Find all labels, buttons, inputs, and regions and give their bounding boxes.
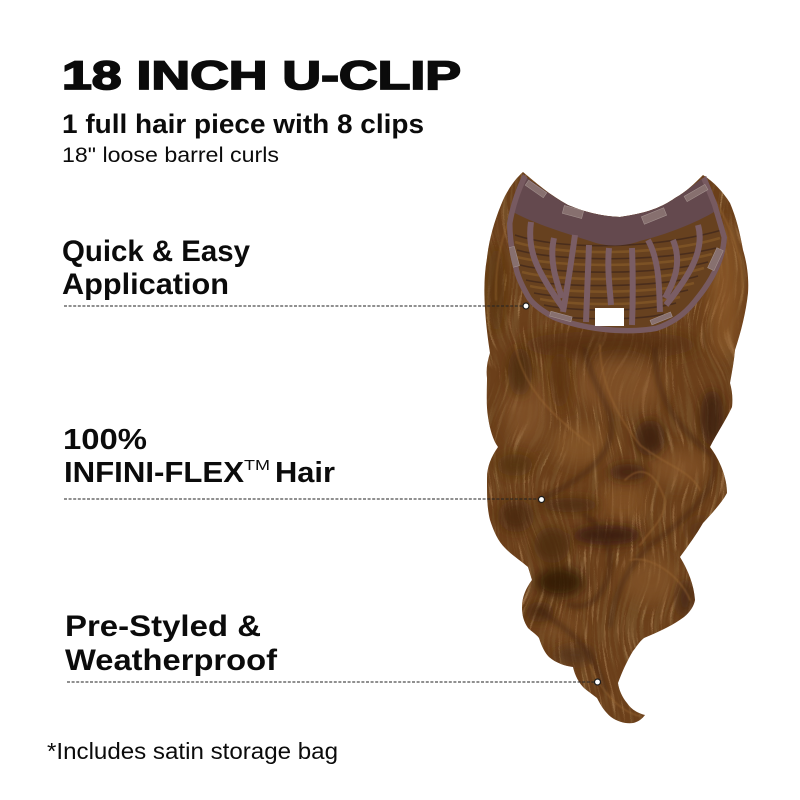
feature label: infini-flex hair bbox=[63, 424, 335, 489]
feature label: pre-styled and weatherproof: Pre-Styled & bbox=[65, 610, 261, 643]
callout line: application bbox=[64, 303, 529, 309]
subtitle: curl description: 18" loose barrel curls bbox=[62, 144, 279, 167]
callout line: weatherproof bbox=[67, 679, 600, 685]
footnote: *Includes satin storage bag bbox=[47, 738, 338, 764]
cap ribs bbox=[530, 222, 700, 325]
clips bbox=[508, 180, 723, 325]
hair light and shadow lobes bbox=[488, 220, 741, 663]
cap edge binding bbox=[507, 174, 727, 333]
hair curl bands bbox=[540, 350, 714, 690]
feature label: quick and easy application bbox=[62, 235, 250, 301]
feature label: quick and easy application: Application bbox=[62, 268, 229, 301]
hair strand texture bbox=[484, 172, 745, 724]
feature label: infini-flex hair: TM bbox=[244, 457, 270, 474]
feature label: pre-styled and weatherproof bbox=[65, 610, 278, 677]
hair wave strokes bbox=[496, 200, 743, 716]
feature label: infini-flex hair: 100% bbox=[63, 424, 147, 456]
callout line: hair bbox=[64, 496, 544, 502]
u-shaped wig cap bbox=[507, 174, 727, 334]
title: 18 INCH U-CLIP bbox=[62, 54, 461, 98]
cap top band bbox=[513, 172, 722, 246]
feature label: infini-flex hair: Hair bbox=[275, 457, 335, 489]
hair body bbox=[484, 172, 748, 724]
feature label: pre-styled and weatherproof: Weatherproof bbox=[65, 644, 278, 677]
subtitle: hair piece count: 1 full hair piece with 8 clips bbox=[62, 109, 424, 139]
cap weft rows bbox=[515, 238, 720, 304]
feature label: infini-flex hair: INFINI-FLEX bbox=[64, 457, 245, 489]
white label tag bbox=[595, 308, 624, 326]
hair extension photo illustration bbox=[484, 172, 748, 724]
feature label: quick and easy application: Quick & Easy bbox=[62, 235, 250, 268]
